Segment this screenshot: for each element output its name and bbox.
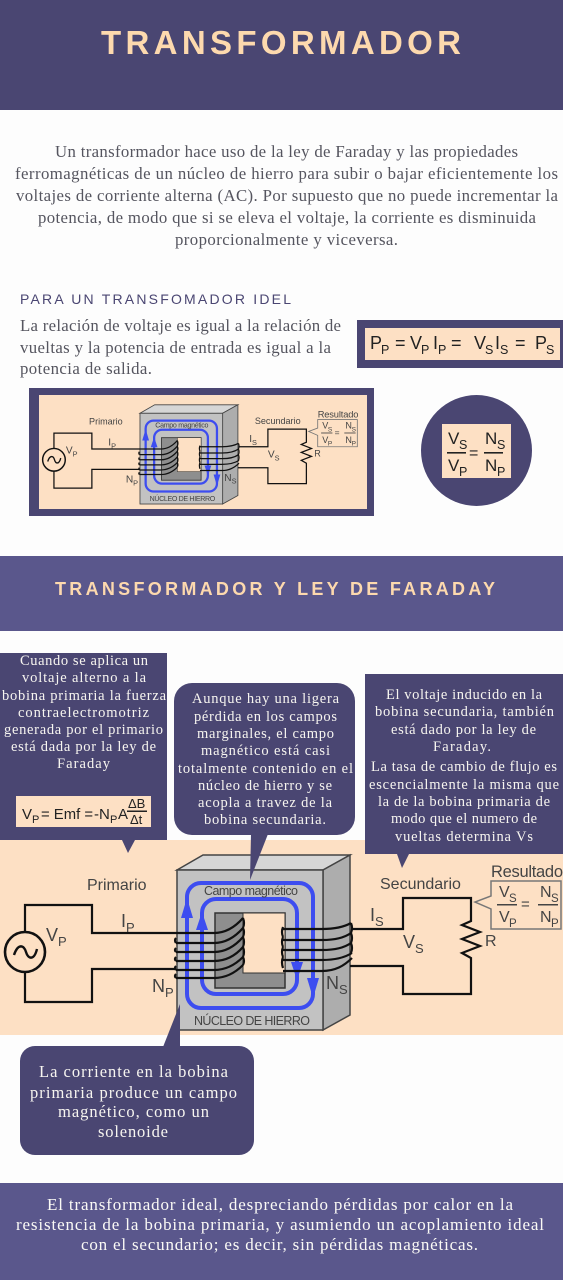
large transformer diagram: Secundario bbox=[380, 876, 461, 893]
small transformer diagram: V bbox=[66, 446, 73, 457]
formula: power equality bbox=[357, 320, 563, 368]
small transformer diagram: R bbox=[314, 448, 321, 458]
callout: primary coil: generada por el primario bbox=[4, 722, 163, 738]
callout: magnetic field: núcleo de hierro y se bbox=[198, 778, 332, 794]
small transformer diagram: S bbox=[232, 477, 237, 486]
large transformer diagram: V bbox=[46, 925, 58, 945]
formula: Faraday emf: P bbox=[110, 814, 117, 826]
ideal transformer text bbox=[20, 316, 341, 378]
large transformer diagram: P bbox=[58, 934, 67, 949]
formula: power equality: I bbox=[433, 333, 438, 353]
callout: solenoid bbox=[20, 1004, 254, 1155]
formula circle: voltage ratio: V bbox=[448, 456, 460, 475]
formula circle: voltage ratio: S bbox=[497, 438, 505, 452]
large transformer diagram: P bbox=[126, 920, 135, 935]
small transformer diagram: N bbox=[345, 421, 352, 431]
footer text: con el secundario; es decir, sin pérdidas magnéticas. bbox=[81, 1235, 478, 1254]
small transformer diagram: V bbox=[322, 421, 328, 431]
formula circle: voltage ratio: P bbox=[497, 465, 505, 479]
footer text: resistencia de la bobina primaria, y asumiendo un acoplamiento ideal bbox=[16, 1215, 544, 1234]
callout: primary coil: contraelectromotriz bbox=[18, 705, 150, 721]
formula: power equality: P bbox=[381, 343, 389, 357]
large transformer diagram: S bbox=[339, 982, 348, 997]
formula: power equality: = bbox=[515, 333, 526, 353]
small transformer diagram: S bbox=[328, 426, 333, 433]
small transformer diagram: S bbox=[352, 426, 357, 433]
intro paragraph: voltajes de corriente alterna (AC). Por supuesto que no puede incrementar la bbox=[16, 186, 559, 205]
formula circle: voltage ratio: N bbox=[485, 429, 497, 448]
large transformer diagram: P bbox=[165, 985, 174, 1000]
formula circle: voltage ratio: N bbox=[485, 456, 497, 475]
small transformer diagram: Campo magnético bbox=[155, 421, 209, 429]
callout: solenoid: solenoide bbox=[98, 1122, 168, 1141]
small transformer diagram: N bbox=[345, 435, 352, 445]
formula: power equality: P bbox=[370, 333, 382, 353]
intro paragraph: proporcionalmente y viceversa. bbox=[175, 230, 398, 249]
formula: Faraday emf: A bbox=[118, 806, 128, 823]
callout: secondary coil: Faraday. bbox=[433, 739, 491, 755]
formula circle: voltage ratio: V bbox=[448, 429, 460, 448]
callout: secondary coil: El voltaje inducido en la bbox=[386, 687, 543, 703]
callout: magnetic field: pérdida en los campos bbox=[194, 709, 337, 725]
callout: primary coil: está dada por la ley de bbox=[11, 739, 156, 755]
small transformer diagram: P bbox=[352, 441, 356, 448]
callout: primary coil: Faraday bbox=[57, 756, 111, 772]
large transformer diagram: NÚCLEO DE HIERRO bbox=[194, 1013, 310, 1028]
ideal transformer text: vueltas y la potencia de entrada es igual a la bbox=[20, 338, 332, 357]
formula: Faraday emf: -N bbox=[94, 806, 110, 823]
callout: magnetic field: totalmente contenido en el bbox=[178, 761, 353, 777]
large transformer diagram: = bbox=[521, 896, 530, 913]
formula circle: voltage ratio: = bbox=[469, 445, 478, 462]
formula circle: voltage ratio bbox=[421, 395, 532, 506]
formula: Faraday emf: P bbox=[32, 814, 39, 826]
small transformer diagram: NÚCLEO DE HIERRO bbox=[150, 494, 216, 503]
callout: primary coil: Cuando se aplica un bbox=[20, 653, 149, 669]
large transformer diagram: N bbox=[152, 976, 165, 996]
large transformer diagram: N bbox=[540, 909, 552, 926]
formula: Faraday emf: = Emf = bbox=[41, 806, 93, 823]
formula: Faraday emf: V bbox=[22, 806, 32, 823]
large transformer diagram: P bbox=[509, 918, 517, 930]
large transformer diagram: S bbox=[375, 914, 384, 929]
callout: primary coil: bobina primaria la fuerza bbox=[2, 688, 167, 704]
formula: Faraday emf: ΔB bbox=[128, 796, 145, 811]
small transformer diagram: N bbox=[224, 473, 232, 484]
callout: magnetic field bbox=[174, 683, 355, 880]
large transformer diagram: S bbox=[551, 893, 559, 905]
callout: secondary coil: está dado por la ley de bbox=[391, 722, 536, 738]
callout: secondary coil bbox=[365, 674, 563, 868]
large transformer diagram: V bbox=[499, 909, 510, 926]
callout: solenoid: La corriente en la bobina bbox=[39, 1062, 229, 1081]
section heading: TRANSFORMADOR Y LEY DE FARADAY bbox=[55, 579, 495, 599]
small transformer diagram: S bbox=[275, 453, 280, 462]
callout: primary coil: voltaje alterno a la bbox=[22, 670, 147, 686]
formula: power equality: = bbox=[395, 333, 406, 353]
callout: secondary coil: modo que el numero de bbox=[391, 811, 537, 827]
footer text: El transformador ideal, despreciando pérdidas por calor en la bbox=[47, 1195, 513, 1214]
formula: power equality: V bbox=[474, 333, 486, 353]
formula circle: voltage ratio: S bbox=[459, 438, 467, 452]
large transformer diagram: Primario bbox=[87, 877, 147, 894]
callout: magnetic field: magnético está casi bbox=[201, 743, 330, 759]
intro paragraph: ferromagnéticas de un núcleo de hierro para subir o bajar eficientemente los bbox=[15, 164, 558, 183]
intro paragraph: potencia, de modo que si se eleva el voltaje, la corriente es disminuida bbox=[38, 208, 537, 227]
callout: magnetic field: acopla a travez de la bbox=[198, 795, 333, 811]
intro paragraph bbox=[15, 142, 559, 249]
small transformer diagram: V bbox=[268, 450, 275, 461]
small transformer diagram: P bbox=[133, 478, 138, 487]
large transformer diagram: Campo magnético bbox=[204, 884, 298, 898]
large transformer diagram: I bbox=[370, 905, 375, 925]
small transformer diagram: N bbox=[126, 474, 133, 485]
large transformer diagram: V bbox=[499, 884, 510, 901]
small transformer diagram: V bbox=[322, 435, 328, 445]
large transformer diagram: N bbox=[326, 973, 339, 993]
large transformer diagram: V bbox=[403, 932, 415, 952]
small transformer diagram: S bbox=[252, 438, 257, 447]
callout: magnetic field: bobina secundaria. bbox=[204, 812, 326, 828]
callout: solenoid: magnético, como un bbox=[58, 1102, 209, 1121]
small transformer diagram bbox=[43, 405, 358, 504]
callout: secondary coil: la de la bobina primaria de bbox=[378, 794, 550, 810]
small transformer diagram: Primario bbox=[89, 417, 123, 427]
small transformer diagram: I bbox=[108, 438, 111, 449]
section banner bbox=[0, 556, 563, 631]
formula: power equality: S bbox=[485, 343, 493, 357]
callout: secondary coil: bobina secundaria, también bbox=[375, 704, 555, 720]
formula: power equality: P bbox=[535, 333, 547, 353]
formula: power equality: V bbox=[410, 333, 422, 353]
subheading: PARA UN TRANSFOMADOR IDEL bbox=[20, 291, 291, 307]
callout: magnetic field: Aunque hay una ligera bbox=[192, 691, 340, 707]
large transformer diagram: S bbox=[509, 893, 517, 905]
callout: primary coil bbox=[0, 653, 167, 853]
callout: magnetic field: marginales, el campo bbox=[197, 726, 334, 742]
formula: power equality: I bbox=[495, 333, 500, 353]
formula: power equality: S bbox=[500, 343, 508, 357]
small transformer diagram: P bbox=[328, 441, 332, 448]
large transformer diagram: R bbox=[485, 933, 497, 950]
formula: power equality: S bbox=[546, 343, 554, 357]
formula: Faraday emf: Δt bbox=[130, 812, 143, 827]
small transformer diagram: P bbox=[111, 441, 116, 450]
small transformer diagram panel bbox=[29, 388, 374, 516]
large transformer diagram: S bbox=[415, 941, 424, 956]
header banner bbox=[0, 0, 563, 110]
callout: secondary coil: vueltas determina Vs bbox=[395, 829, 533, 845]
large transformer diagram: I bbox=[121, 911, 126, 931]
ideal transformer text: La relación de voltaje es igual a la relación de bbox=[20, 316, 341, 335]
formula: power equality: = bbox=[451, 333, 462, 353]
small transformer diagram: P bbox=[73, 449, 78, 458]
formula: power equality: P bbox=[438, 343, 446, 357]
ideal transformer text: potencia de salida. bbox=[20, 359, 152, 378]
large transformer diagram: N bbox=[540, 884, 552, 901]
title: TRANSFORMADOR bbox=[101, 24, 461, 61]
formula: power equality: P bbox=[421, 343, 429, 357]
callout: secondary coil: La tasa de cambio de flujo es bbox=[371, 759, 557, 775]
callout: solenoid: primaria produce un campo bbox=[30, 1083, 237, 1102]
large transformer diagram: Resultado bbox=[491, 863, 563, 881]
small transformer diagram: I bbox=[249, 434, 252, 445]
formula: Faraday emf bbox=[16, 796, 151, 827]
callout: secondary coil: escencialmente la misma que bbox=[369, 777, 559, 793]
formula circle: voltage ratio: P bbox=[459, 465, 467, 479]
small transformer diagram: Resultado bbox=[318, 409, 358, 419]
footer banner bbox=[0, 1183, 563, 1280]
large transformer diagram bbox=[5, 855, 563, 1030]
footer text bbox=[16, 1195, 544, 1254]
small transformer diagram: = bbox=[335, 427, 340, 437]
large diagram band bbox=[0, 840, 563, 1035]
large transformer diagram: P bbox=[551, 918, 559, 930]
intro paragraph: Un transformador hace uso de la ley de Faraday y las propiedades bbox=[55, 142, 518, 161]
small transformer diagram: Secundario bbox=[255, 416, 301, 426]
